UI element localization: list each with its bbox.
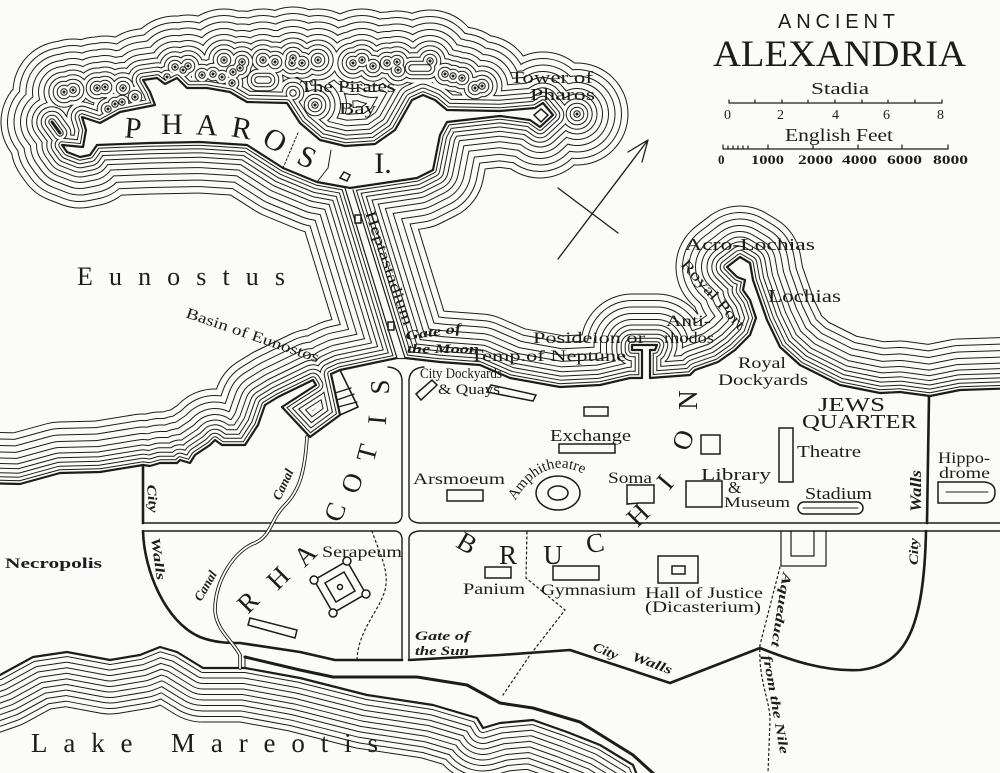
label: Pirates Bay: Bay xyxy=(339,99,377,118)
label: Jews Quarter: JEWS xyxy=(818,394,885,416)
harbour pier with hatching xyxy=(335,370,358,415)
lake Mareotis contour lines xyxy=(0,647,645,773)
north arrow xyxy=(558,140,648,259)
stadia scale: 8 xyxy=(937,108,944,123)
label: City Dockyards and Quays xyxy=(420,366,502,398)
label: Stadium: Stadium xyxy=(805,484,872,503)
label: Posideion / Temple of Neptune: Posideion or xyxy=(533,330,646,347)
label: Exchange: Exchange xyxy=(550,426,631,445)
label: Rhacotis: S xyxy=(365,379,395,395)
label: Heptastadium: Heptastadium xyxy=(361,209,416,328)
stadia scale: Stadia xyxy=(811,79,870,98)
label: city walls annotations: Walls xyxy=(630,649,675,677)
label: Library and Museum: Library xyxy=(701,465,772,484)
label: Aqueduct from the Nile xyxy=(760,570,795,755)
label: canal annotations: Canal xyxy=(191,568,220,604)
label: Gymnasium: Gymnasium xyxy=(541,582,637,599)
label: Posideion / Temple of Neptune xyxy=(470,330,646,365)
label: Library and Museum: Museum xyxy=(724,495,790,511)
label: Bruchion xyxy=(452,390,703,570)
stadia scale: 6 xyxy=(883,108,890,123)
label: city walls annotations: City xyxy=(591,639,621,663)
label: Bruchion: B xyxy=(452,526,482,560)
label: Bruchion: R xyxy=(499,540,517,570)
english feet scale: 6000 xyxy=(887,152,922,167)
label: Bruchion: C xyxy=(584,527,606,559)
label: Theatre: Theatre xyxy=(797,442,861,461)
label: Bruchion: I xyxy=(651,469,679,495)
label: Pirates Bay xyxy=(300,77,395,118)
label: Bruchion: O xyxy=(666,426,700,454)
label: Pharos Island xyxy=(123,108,392,180)
stadia scale: 4 xyxy=(832,108,839,123)
label: Tower of Pharos: Pharos xyxy=(530,85,595,104)
label: Lake Mareotis: Lake Mareotis xyxy=(31,728,378,758)
Heptastadium causeway xyxy=(345,188,405,358)
english feet scale: 4000 xyxy=(842,152,877,167)
label: Amphitheatre: Amphitheatre xyxy=(509,459,585,500)
english feet scale: 0 xyxy=(718,152,724,167)
english feet scale xyxy=(718,125,968,167)
label: Pharos Island: P xyxy=(123,111,143,146)
label: Bruchion: N xyxy=(673,390,703,410)
main streets xyxy=(143,367,1000,660)
title: ALEXANDRIA xyxy=(713,34,966,75)
sea contour lines around Pharos, Heptastadium and the harbour shore xyxy=(0,58,1000,484)
Tower of Pharos building xyxy=(534,109,548,122)
label: Soma: Soma xyxy=(608,470,652,487)
label: City Dockyards and Quays: & Quays xyxy=(438,382,500,398)
stadia scale: 2 xyxy=(777,108,784,123)
label: Rhacotis: H xyxy=(260,560,296,596)
label: Pharos Island: O xyxy=(257,121,292,160)
label: Lochias: Lochias xyxy=(768,286,841,306)
english feet scale: 1000 xyxy=(751,152,784,167)
label: Bruchion: H xyxy=(620,497,656,533)
label: Gate of the Moon: the Moon xyxy=(407,341,479,356)
canal xyxy=(215,437,307,668)
label: Tower of Pharos xyxy=(510,68,595,104)
label: Arsinoeum: Arsmoeum xyxy=(413,471,506,488)
label: canal annotations: Canal xyxy=(269,466,297,502)
label: Library and Museum xyxy=(701,465,790,511)
label: Hippodrome: drome xyxy=(939,465,990,482)
label: Hippodrome: Hippo- xyxy=(938,450,990,467)
label: Gate of the Moon: Gate of xyxy=(404,320,464,343)
dotted boundaries and aqueduct xyxy=(357,531,780,773)
label: Hall of Justice: (Dicasterium) xyxy=(645,599,761,616)
label: Pharos Island: R xyxy=(229,111,255,146)
label: Rhacotis: C xyxy=(318,498,352,526)
label: Posideion / Temple of Neptune: Temp.of Neptune xyxy=(470,348,626,365)
label: Rhacotis: R xyxy=(231,585,265,619)
label: Panium: Panium xyxy=(463,581,526,598)
label: Jews Quarter xyxy=(802,394,918,433)
label: Antirhodos xyxy=(664,313,714,347)
city walls xyxy=(143,396,929,683)
label: Rhacotis: O xyxy=(335,469,369,497)
label: Hall of Justice: Hall of Justice xyxy=(645,585,763,602)
stadia scale: 0 xyxy=(724,108,731,123)
label: Jews Quarter: QUARTER xyxy=(802,411,918,433)
label: Eunostus: Eunostus xyxy=(77,262,285,291)
label: Rhacotis: I xyxy=(362,414,392,426)
mainland with thick shoreline xyxy=(0,257,1000,773)
label: Tower of Pharos: Tower of xyxy=(510,68,593,87)
label: Hippodrome xyxy=(938,450,990,482)
label: city walls annotations: City xyxy=(144,484,161,513)
label: Rhacotis: T xyxy=(350,441,384,465)
label: Pharos Island: I. xyxy=(374,147,392,180)
label: Acro-Lochias: Acro-Lochias xyxy=(685,235,815,254)
Pharos island land xyxy=(62,78,553,188)
lake shore canal strip xyxy=(245,657,655,773)
label: Serapeum: Serapeum xyxy=(322,544,403,561)
label: Royal Port: Royal Port xyxy=(677,257,749,334)
label: Library and Museum: & xyxy=(728,478,741,497)
title: ANCIENT xyxy=(778,11,895,33)
label: canal annotations xyxy=(191,466,297,604)
label: Rhacotis: A xyxy=(287,537,323,573)
label: Antirhodos: Anti- xyxy=(666,313,711,330)
label: Bruchion: U xyxy=(543,540,563,570)
label: Necropolis: Necropolis xyxy=(5,556,102,572)
label: Pharos Island: H xyxy=(161,108,183,141)
label: Gate of the Moon xyxy=(404,320,479,356)
label: Gate of the Sun: Gate of xyxy=(415,628,472,643)
label: Royal Dockyards: Dockyards xyxy=(718,372,808,389)
english feet scale: 2000 xyxy=(798,152,833,167)
label: city walls annotations xyxy=(144,470,925,677)
label: city walls annotations: Walls xyxy=(908,470,925,512)
label: city walls annotations: City xyxy=(906,538,921,565)
english feet scale: 8000 xyxy=(933,152,968,167)
buildings xyxy=(248,380,995,638)
label: Hall of Justice xyxy=(645,585,763,616)
label: Basin of Eunostos: Basin of Eunostos xyxy=(184,306,321,366)
title xyxy=(713,11,966,75)
small building and divider on Pharos xyxy=(283,133,350,182)
label: Pirates Bay: The Pirates xyxy=(300,77,395,96)
label: Aqueduct from the Nile: from the Nile xyxy=(760,654,792,755)
label: Gate of the Sun: the Sun xyxy=(415,643,469,658)
stadia scale xyxy=(724,79,944,123)
label: Rhacotis xyxy=(231,379,395,619)
label: city walls annotations: Walls xyxy=(148,536,169,581)
rocks off Pharos xyxy=(52,58,577,133)
label: Royal Dockyards: Royal xyxy=(738,355,787,372)
label: Gate of the Sun xyxy=(415,628,472,658)
label: Pharos Island: A xyxy=(195,108,219,143)
english feet scale: English Feet xyxy=(785,125,893,145)
label: Royal Dockyards xyxy=(718,355,808,389)
label: Aqueduct from the Nile: Aqueduct xyxy=(768,570,795,648)
label: Antirhodos: rhodos xyxy=(664,330,714,347)
label: Pharos Island: S xyxy=(292,139,321,176)
Serapeum fort xyxy=(309,556,371,618)
label: City Dockyards and Quays: City Dockyards xyxy=(420,366,502,382)
